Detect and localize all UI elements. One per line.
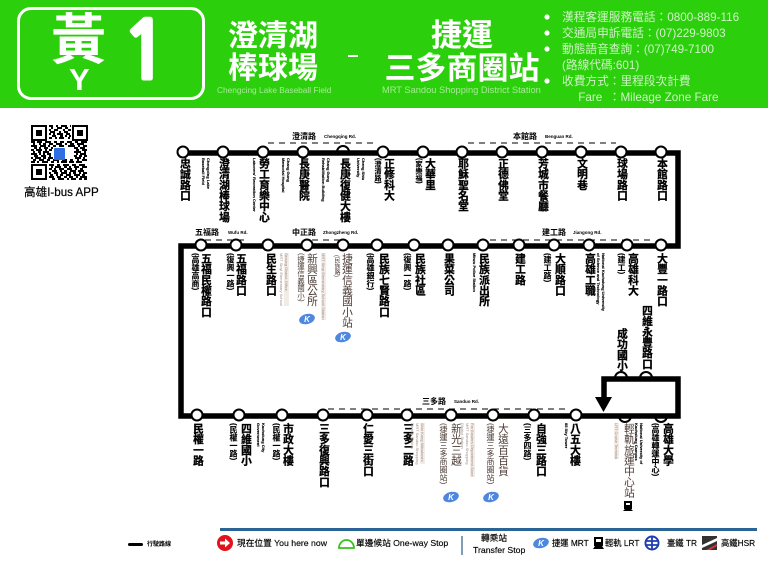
stop: 市政大樓: 市政大樓 bbox=[282, 423, 294, 466]
sub label: 三多四路: (三多四路) bbox=[523, 423, 532, 460]
english: 高雄科大: National Kaohsiung University bbox=[601, 253, 606, 311]
middle row stop labels bbox=[191, 252, 668, 328]
stop: 捷運信義國小站: 捷運信義國小站 bbox=[341, 253, 353, 328]
legend: HSR bbox=[702, 536, 755, 550]
stop: 長庚復健大樓: 長庚復健大樓 bbox=[339, 158, 351, 222]
stop: 民權一路: 民權一路 bbox=[192, 423, 204, 466]
english: 輕軌旅運中心站: LRT Cruise Terminal bbox=[614, 423, 619, 459]
one-way label: 單邊候站 One-way Stop bbox=[356, 538, 448, 548]
legend: TR bbox=[644, 536, 697, 550]
app label: 高雄I-bus APP bbox=[24, 186, 99, 199]
bottom row stop labels: Government bbox=[256, 423, 261, 447]
stop: 成功國小: 成功國小 bbox=[616, 328, 628, 371]
english: 長庚醫院: Chang Gung bbox=[286, 158, 291, 182]
stop: 八五大樓: 八五大樓 bbox=[569, 423, 581, 466]
legend: you are here bbox=[217, 535, 328, 551]
sub label: 民權一路: (民權一路) bbox=[272, 423, 281, 460]
route letter: Y bbox=[69, 62, 90, 97]
info text: (路線代碼:601) bbox=[562, 59, 639, 72]
sub label: 捷運三多商圈站: (捷運三多商圈站) bbox=[439, 423, 448, 484]
stop: 正德佛堂: 正德佛堂 bbox=[497, 158, 509, 201]
MRT icon: K bbox=[538, 539, 545, 548]
red location icon bbox=[217, 535, 233, 551]
stop: 三多二路: 三多二路 bbox=[402, 423, 414, 466]
legend bbox=[128, 528, 757, 555]
english: 捷運信義國小站: MRT Sinyi Elementary School Station bbox=[321, 253, 326, 320]
bus route line bbox=[181, 153, 678, 416]
TR label: 臺鐵 TR bbox=[667, 538, 697, 548]
english: 新興區公所: Sinsing District Office bbox=[284, 253, 289, 291]
bottom row stop labels bbox=[192, 422, 674, 498]
destination name: 三多商圈站 bbox=[384, 51, 540, 86]
stop: 高雄大學: 高雄大學 bbox=[662, 423, 674, 466]
stop: 五福民權路口: 五福民權路口 bbox=[200, 253, 212, 317]
legend: one-way stop bbox=[338, 538, 448, 549]
green half circle icon bbox=[338, 539, 355, 549]
info text: Fare ：Mileage Zone Fare bbox=[578, 91, 719, 104]
sub label: 捷運三多商圈站: (捷運三多商圈站) bbox=[486, 423, 495, 484]
stop: 大遠百百貨: 大遠百百貨 bbox=[497, 423, 509, 476]
TR icon bbox=[644, 536, 660, 550]
header band bbox=[0, 0, 768, 108]
road label: 五福路: 五福路 bbox=[195, 228, 219, 237]
origin english: Chengcing Lake Baseball Field bbox=[217, 85, 331, 95]
road label: 建工路: 建工路 bbox=[542, 228, 566, 237]
sub label: 復興一路: (復興一路) bbox=[226, 253, 235, 290]
stop circles bbox=[178, 146, 666, 420]
QR code bbox=[31, 125, 88, 180]
direction arrow bbox=[595, 397, 612, 412]
route number: 1 bbox=[121, 12, 169, 91]
stop: 芳城市餐廳: 芳城市餐廳 bbox=[537, 158, 549, 212]
english: 長庚復健大樓: Chang Gung bbox=[326, 158, 331, 182]
road label: 中正路: 中正路 bbox=[292, 228, 316, 237]
destination english: MRT Sandou Shopping District Station bbox=[382, 85, 541, 95]
stop: 仁愛三街口: 仁愛三街口 bbox=[362, 423, 374, 476]
stop: 澄清湖棒球場: 澄清湖棒球場 bbox=[218, 158, 230, 222]
stop: 輕軌旅運中心站: 輕軌旅運中心站 bbox=[623, 423, 635, 498]
stop: 球場路口: 球場路口 bbox=[616, 158, 628, 201]
stop: 果菜公司: 果菜公司 bbox=[443, 253, 455, 296]
MRT icon at 新興區公所: K bbox=[304, 315, 311, 324]
sub label: 高雄高商: (高雄高商) bbox=[191, 253, 200, 290]
MRT icon at 大遠百百貨: K bbox=[488, 493, 495, 502]
info text bbox=[562, 10, 739, 104]
info text: 動態語音查詢：(07)749-7100 bbox=[562, 43, 714, 56]
MRT icon at 大遠百百貨 bbox=[482, 490, 500, 504]
middle row stop labels: of Science and Technology bbox=[596, 253, 601, 304]
english: 澄清湖棒球場 bbox=[201, 158, 211, 189]
stop: 五福路口: 五福路口 bbox=[235, 253, 247, 296]
origin name: 澄清湖 bbox=[228, 20, 318, 53]
legend: MRT bbox=[533, 538, 589, 548]
road label english: Sanduo Rd.: Sanduo Rd. bbox=[454, 399, 479, 404]
stop: 高雄科大: 高雄科大 bbox=[627, 253, 639, 296]
english: 長庚醫院 bbox=[280, 158, 291, 192]
destination name bbox=[384, 18, 540, 86]
sub label: 建工: (建工) bbox=[617, 253, 626, 274]
road label: 三多路: 三多路 bbox=[422, 397, 446, 406]
route name: 黃 bbox=[51, 9, 106, 71]
route badge bbox=[17, 7, 205, 100]
bullets bbox=[544, 14, 550, 84]
stop: 民族社區: 民族社區 bbox=[414, 253, 426, 296]
stop: 三多復興路口: 三多復興路口 bbox=[318, 423, 330, 487]
stop: 自強三路口: 自強三路口 bbox=[535, 423, 547, 476]
english: 八五大樓: 85 Sky Tower bbox=[564, 423, 569, 448]
english: 市政大樓: Kaohsiung City bbox=[261, 423, 266, 452]
service information list bbox=[544, 10, 739, 104]
legend: transfer stop title: 轉乘站 bbox=[481, 533, 507, 543]
stop: 四維國小: 四維國小 bbox=[240, 423, 252, 466]
origin name bbox=[228, 20, 318, 85]
HSR label: 高鐵HSR bbox=[721, 538, 755, 548]
stop: 文明巷: 文明巷 bbox=[576, 158, 588, 190]
dash between terminals bbox=[348, 55, 358, 57]
MRT icon at 新光三越 bbox=[442, 490, 460, 504]
MRT icon at 新光三越: K bbox=[448, 493, 455, 502]
LRT icon bbox=[593, 537, 604, 549]
LRT label: 輕軌 LRT bbox=[605, 538, 639, 548]
stop: 民生路口: 民生路口 bbox=[265, 253, 277, 296]
MRT icon bbox=[533, 538, 549, 548]
stop: 建工路: 建工路 bbox=[514, 253, 526, 285]
stop: 新光三越: 新光三越 bbox=[450, 423, 462, 466]
middle row stop labels: MRT Sinyi Elementary School bbox=[279, 253, 284, 306]
one-way half stops bbox=[337, 146, 667, 422]
stop: 民族七賢路口: 民族七賢路口 bbox=[378, 253, 390, 317]
stop: 新興區公所: 新興區公所 bbox=[306, 253, 318, 306]
destination name: 捷運 bbox=[431, 18, 493, 53]
stop: 四維永豐路口: 四維永豐路口 bbox=[641, 305, 653, 369]
legend: route direction bbox=[128, 540, 171, 548]
QR code and app label bbox=[24, 125, 99, 199]
road label: 本館路: 本館路 bbox=[513, 132, 537, 141]
MRT label: 捷運 MRT bbox=[552, 538, 589, 548]
english: 高雄科大 bbox=[596, 253, 606, 311]
dashed road brackets bbox=[205, 143, 655, 409]
MRT icon at 捷運信義國小站 bbox=[334, 330, 352, 344]
english: 正修科大: Cheng Shiu bbox=[361, 158, 366, 180]
stop: 長庚醫院: 長庚醫院 bbox=[298, 158, 310, 201]
stop: 民族派出所: 民族派出所 bbox=[478, 253, 490, 306]
bottom row stop labels: MRT Sanduo Shopping bbox=[415, 423, 420, 464]
sub label: 捷運信義國小: (捷運信義國小) bbox=[297, 253, 306, 302]
english: 勞工育樂中心: Laborers' Recreation Center bbox=[252, 158, 257, 212]
road label english: Benguan Rd.: Benguan Rd. bbox=[545, 134, 573, 139]
MRT icon at 新興區公所 bbox=[298, 312, 316, 326]
legend: LRT bbox=[593, 537, 640, 549]
english: 民族派出所: Minzu Police Station bbox=[472, 253, 477, 292]
stop: 本館路口: 本館路口 bbox=[656, 158, 668, 201]
stop: 忠誠路口: 忠誠路口 bbox=[179, 158, 191, 201]
icon: LRT at 輕軌旅運中心站 bbox=[623, 501, 633, 511]
top row stop labels: University bbox=[356, 158, 361, 177]
english: 正修科大 bbox=[356, 158, 366, 180]
stop: 勞工育樂中心: 勞工育樂中心 bbox=[258, 158, 270, 222]
english: 新光三越: Shin Kong Mitsukoshi bbox=[420, 423, 425, 461]
red location label: 現在位置 You here now bbox=[237, 538, 327, 548]
top row stop labels: Baseball Field bbox=[201, 158, 206, 185]
stop: 耶穌聖名堂: 耶穌聖名堂 bbox=[457, 158, 469, 212]
info text: 交通局申訴電話：(07)229-9803 bbox=[562, 27, 726, 40]
sub label: 民族路: (民族路) bbox=[333, 255, 339, 277]
sub label: 澄清路: (澄清路) bbox=[374, 158, 381, 184]
legend rule bbox=[220, 528, 757, 531]
stop: 高雄工職: 高雄工職 bbox=[584, 253, 596, 296]
sub label: 家樂福: (家樂福) bbox=[415, 158, 422, 184]
sub label: 高雄銀行: (高雄銀行) bbox=[366, 253, 375, 290]
english: 高雄大學 bbox=[634, 423, 644, 464]
stop: 正修科大: 正修科大 bbox=[383, 158, 395, 201]
english: 長庚復健大樓 bbox=[320, 158, 331, 202]
sub label: 民權一路: (民權一路) bbox=[229, 423, 238, 460]
sub label: 建工路: (建工路) bbox=[543, 253, 552, 282]
english: 市政大樓 bbox=[256, 423, 266, 452]
HSR icon bbox=[702, 536, 717, 550]
stop: 大順路口: 大順路口 bbox=[554, 253, 566, 296]
bottom row stop labels: MRT Sanduo Shopping bbox=[465, 423, 470, 464]
legend divider bbox=[461, 536, 463, 555]
route swatch label: 行駛路線 bbox=[147, 542, 171, 548]
sub label: 高雄轉運中心: (高雄轉運中心) bbox=[651, 423, 660, 476]
info text: 收費方式：里程段次計費 bbox=[562, 75, 691, 88]
road label english: Chengqing Rd.: Chengqing Rd. bbox=[324, 134, 356, 139]
MRT icon at 捷運信義國小站: K bbox=[340, 333, 347, 342]
road label: 澄清路: 澄清路 bbox=[292, 132, 316, 141]
sub label: 復興一路: (復興一路) bbox=[403, 253, 412, 290]
bottom row stop labels: District Station bbox=[460, 423, 465, 449]
info text: 漢程客運服務電話：0800-889-116 bbox=[562, 11, 739, 24]
origin name: 棒球場 bbox=[228, 52, 318, 85]
bottom row stop labels: Kaohsiung Campus bbox=[634, 423, 639, 461]
bottom row stop labels: District Station bbox=[410, 423, 415, 449]
english: 高雄大學: National University of bbox=[639, 423, 644, 464]
road label english: Wufu Rd.: Wufu Rd. bbox=[228, 230, 248, 235]
top row stop labels: Rehabilitation Building bbox=[321, 158, 326, 202]
english: 澄清湖棒球場: Chengcing Lake bbox=[206, 158, 211, 189]
legend: transfer stop title bbox=[473, 533, 526, 555]
english: 大遠百百貨: Far Eastern Department Store bbox=[470, 423, 475, 477]
top row stop labels bbox=[179, 158, 668, 223]
legend: transfer stop title: Transfer Stop bbox=[473, 545, 525, 555]
route swatch bbox=[128, 543, 143, 546]
stop: 大豐一路口: 大豐一路口 bbox=[656, 253, 668, 306]
road label english: Jiangong Rd.: Jiangong Rd. bbox=[573, 230, 602, 235]
stop: 大華里: 大華里 bbox=[424, 158, 436, 190]
top row stop labels: Memorial Hospital bbox=[281, 158, 286, 192]
road label english: Zhongzheng Rd.: Zhongzheng Rd. bbox=[323, 230, 358, 235]
